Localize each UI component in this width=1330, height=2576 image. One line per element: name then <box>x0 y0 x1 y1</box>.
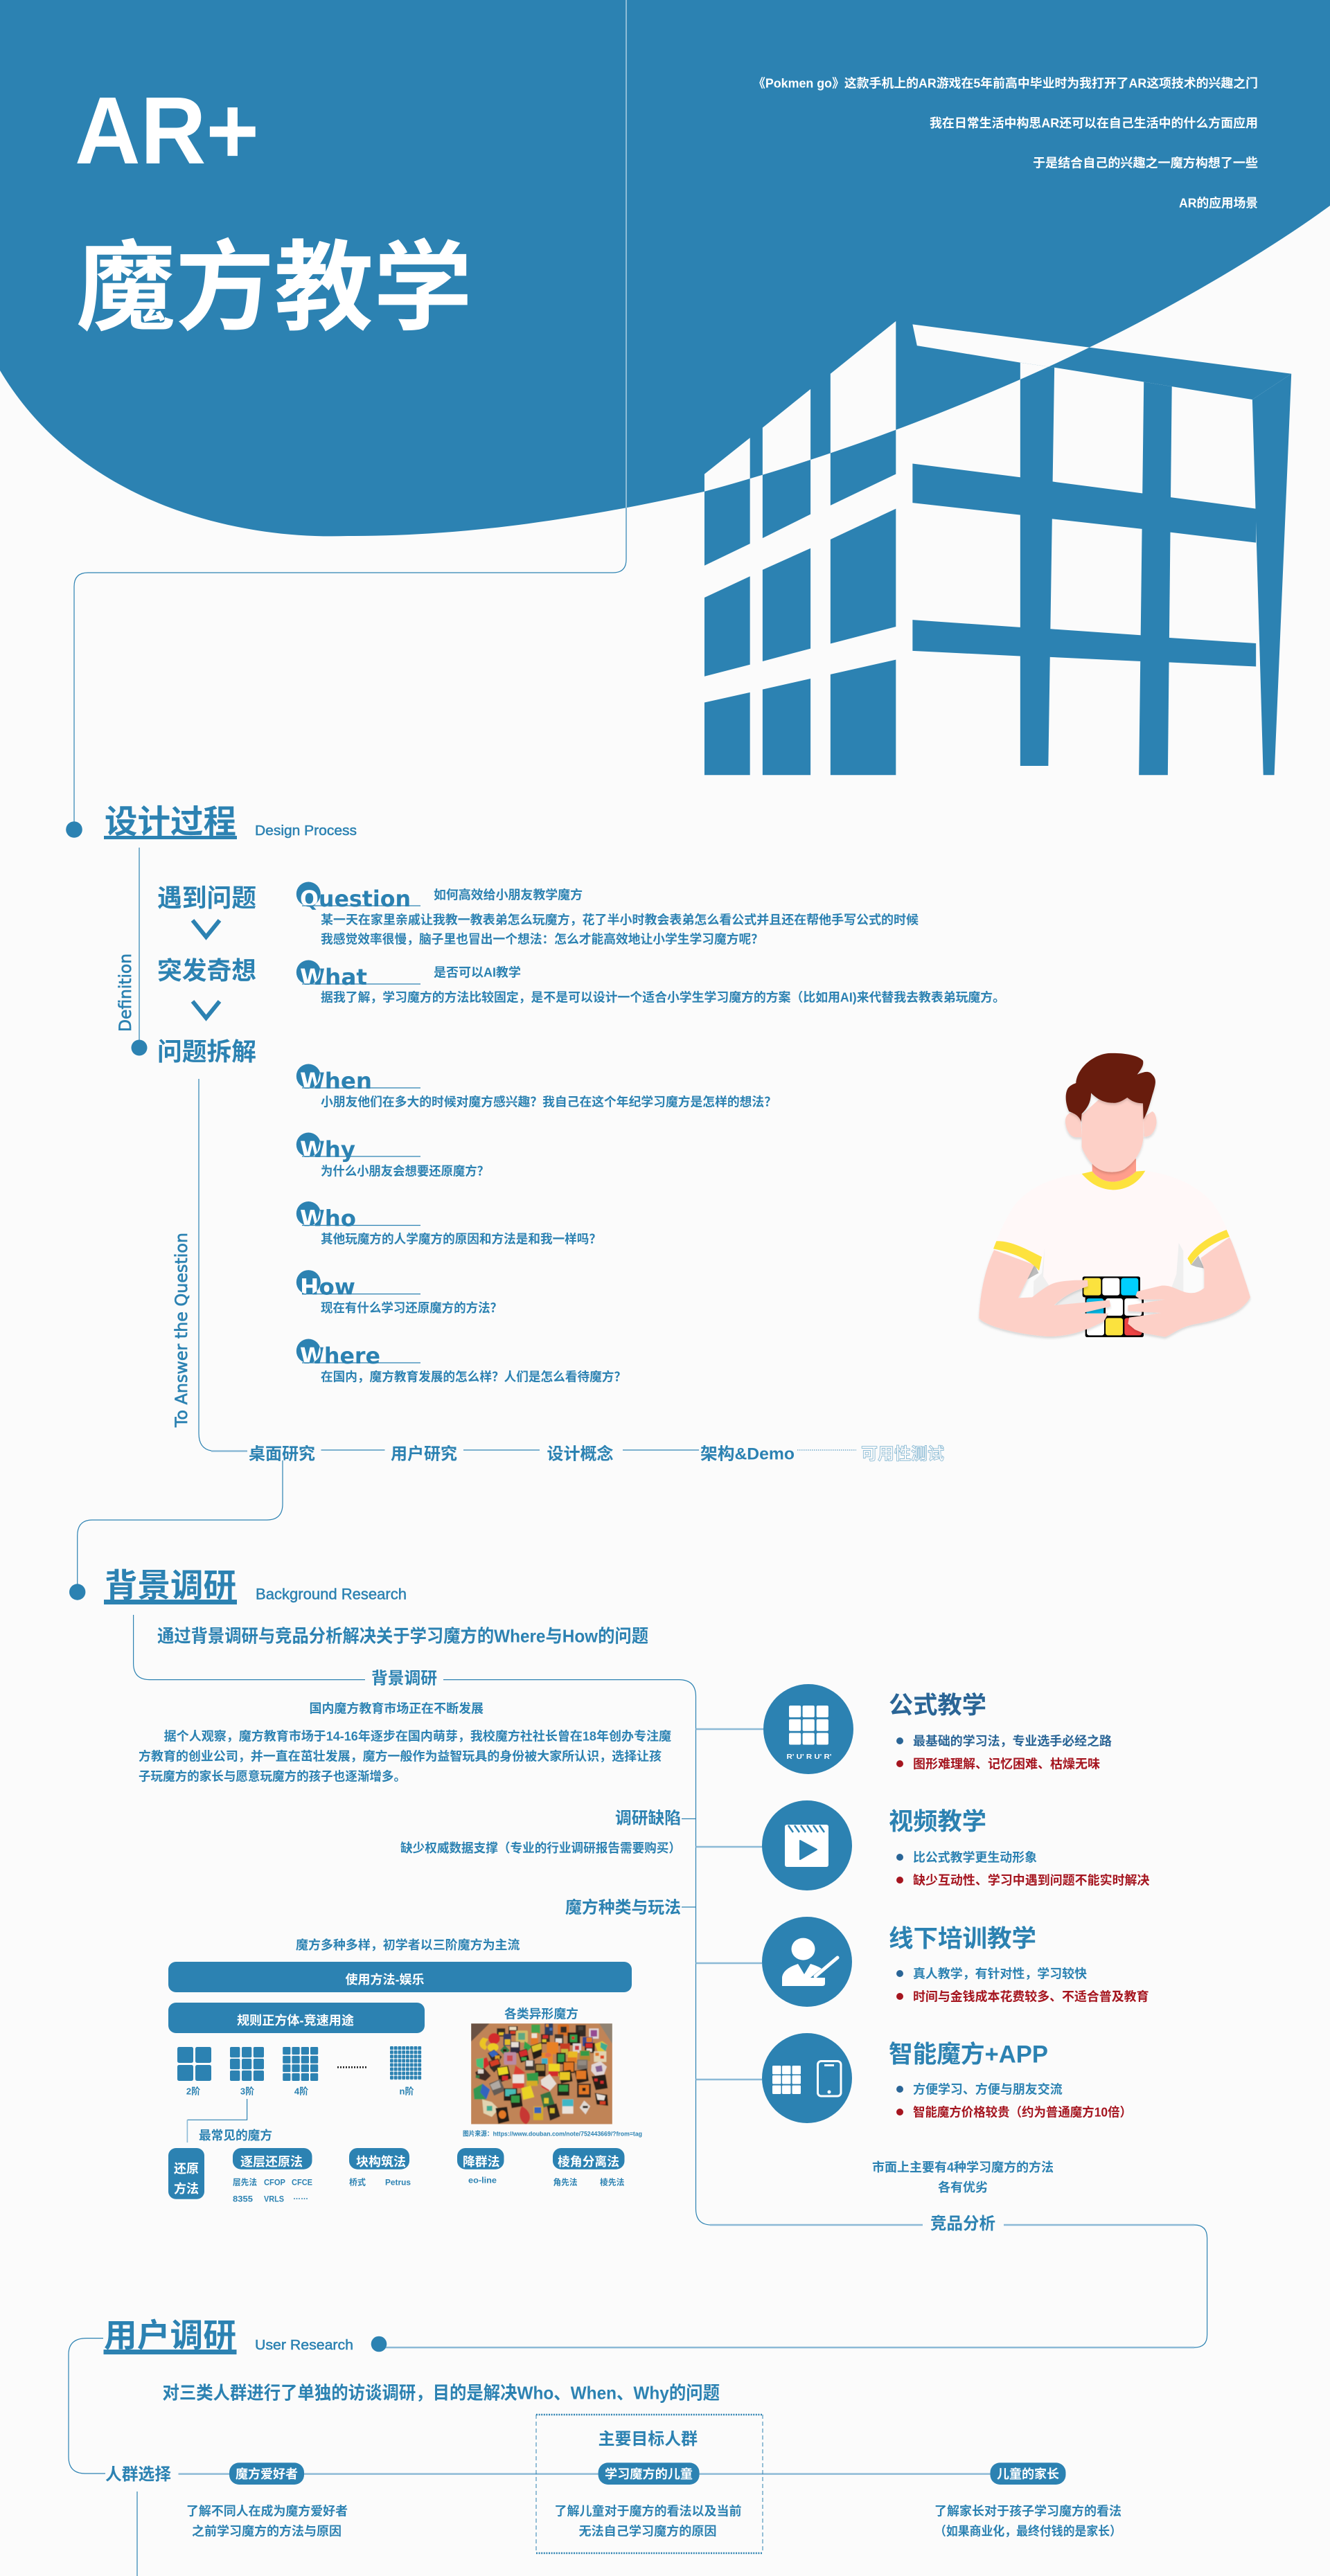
block: Where: Where <box>300 1343 380 1369</box>
persona: 儿童的家长: （如果商业化，最终付钱的是家长） <box>934 2523 1121 2539</box>
persona: 学习魔方的儿童: 无法自己学习魔方的原因 <box>579 2523 716 2539</box>
panel: 线下培训教学: 真人教学，有针对性，学习较快 <box>913 1967 1087 1980</box>
panel: 线下培训教学: 时间与金钱成本花费较多、不适合普及教育 <box>913 1989 1149 2004</box>
chart: cube orders 2, 3, 4 and n: 2阶 <box>186 2086 200 2097</box>
panel: solving methods: 块构筑法 <box>356 2154 406 2169</box>
intro paragraph: AR的应用场景 <box>1179 195 1258 211</box>
vertical label and line: To Answer the Question: To Answer the Question <box>172 1233 191 1428</box>
definition stage column: Definition <box>116 954 135 1032</box>
process timeline: 可用性测试 <box>861 1445 944 1464</box>
persona: 儿童的家长: 儿童的家长 <box>997 2467 1059 2481</box>
connector lines: user research <box>69 2338 992 2576</box>
chart: cube orders 2, 3, 4 and n <box>177 2046 422 2097</box>
icon: formula teaching circle: R' U' R U' R' <box>787 1753 831 1761</box>
process timeline: 设计概念 <box>547 1444 614 1464</box>
panel: solving methods: 降群法 <box>463 2155 499 2169</box>
persona: 魔方爱好者: 魔方爱好者 <box>236 2467 298 2481</box>
block: Why <box>296 1133 489 1179</box>
photo source caption: 图片来源：https://www.douban.com/note/752443669/?from=tag <box>463 2130 642 2138</box>
block: How: 现在有什么学习还原魔方的方法？ <box>321 1300 502 1315</box>
block: Who: Who <box>300 1205 356 1231</box>
heading: 背景调研: 背景调研 <box>105 1567 236 1604</box>
heading: 用户调研: User Research <box>255 2338 353 2353</box>
block: Question: 如何高效给小朋友教学魔方 <box>434 888 583 902</box>
heading: 设计过程: 设计过程 <box>105 803 236 840</box>
panel: 视频教学: 视频教学 <box>889 1809 986 1836</box>
callout: main target group dashed box: 主要目标人群 <box>598 2430 698 2449</box>
panel: solving methods <box>168 2148 625 2203</box>
persona: 魔方爱好者 <box>186 2462 348 2539</box>
panel: background research text: 国内魔方教育市场正在不断发展 <box>309 1701 484 1716</box>
chart: cube orders 2, 3, 4 and n: 3阶 <box>240 2086 254 2097</box>
block: What: 据我了解，学习魔方的方法比较固定，是不是可以设计一个适合小学生学习魔方的方案（比如用AI)来代替我去教表弟玩魔方。 <box>321 990 1005 1004</box>
panel: background research text: 方教育的创业公司，并一直在茁壮发展，魔方一般作为益智玩具的身份被大家所认识，选择让孩 <box>139 1749 662 1763</box>
process timeline: 桌面研究 <box>249 1445 315 1464</box>
panel: solving methods: …… <box>293 2192 308 2201</box>
summary sentence: 通过背景调研与竞品分析解决关于学习魔方的Where与How的问题 <box>157 1625 648 1646</box>
panel: 公式教学: 公式教学 <box>889 1692 986 1719</box>
heading: 各类异形魔方: 各类异形魔方 <box>504 2007 578 2021</box>
panel: solving methods: Petrus <box>385 2177 411 2187</box>
panel: solving methods: 角先法 <box>553 2177 578 2187</box>
block: When: When <box>300 1068 372 1094</box>
panel: solving methods: 逐层还原法 <box>240 2155 303 2169</box>
panel: solving methods: 方法 <box>174 2181 199 2196</box>
panel: 智能魔方+APP: 智能魔方+APP <box>889 2041 1048 2068</box>
persona: 魔方爱好者: 了解不同人在成为魔方爱好者 <box>186 2504 348 2518</box>
block: Who: 其他玩魔方的人学魔方的原因和方法是和我一样吗？ <box>321 1231 601 1246</box>
title: AR+ 魔方教学: AR+ <box>75 78 259 184</box>
persona: 学习魔方的儿童 <box>554 2462 741 2539</box>
block: What: What <box>300 964 367 990</box>
panel: solving methods: CFOP <box>264 2177 285 2187</box>
panel: solving methods: 还原 <box>174 2162 199 2176</box>
panel: 公式教学: 图形难理解、记忆困难、枯燥无味 <box>913 1757 1100 1771</box>
block: What: What <box>300 964 367 990</box>
competitor summary <box>872 2160 1054 2233</box>
block: How: How <box>300 1274 355 1300</box>
panel: 线下培训教学 <box>889 1926 1149 2004</box>
icon: video teaching circle <box>762 1800 852 1890</box>
panel: 智能魔方+APP <box>889 2041 1132 2119</box>
panel: background research text: 缺少权威数据支撑（专业的行业调研报告需要购买） <box>400 1841 681 1855</box>
panel: 视频教学: 比公式教学更生动形象 <box>913 1850 1037 1864</box>
persona: 学习魔方的儿童: 学习魔方的儿童 <box>605 2467 693 2481</box>
user research summary sentence: 对三类人群进行了单独的访谈调研，目的是解决Who、When、Why的问题 <box>162 2382 720 2403</box>
chart: cube orders 2, 3, 4 and n: 4阶 <box>294 2086 308 2097</box>
building illustration <box>704 321 1291 775</box>
panel: background research text: 魔方多种多样，初学者以三阶魔方为主流 <box>296 1938 520 1952</box>
illustration: person solving a cube <box>979 1053 1250 1337</box>
persona: 儿童的家长 <box>934 2462 1121 2539</box>
panel: background research text: 调研缺陷 <box>615 1809 681 1828</box>
panel: 线下培训教学: 线下培训教学 <box>889 1926 1036 1953</box>
connector: 3阶 to solving methods <box>187 2099 272 2143</box>
connector: 3阶 to solving methods: 最常见的魔方 <box>199 2128 272 2143</box>
definition stage column: 突发奇想 <box>157 956 256 985</box>
title: AR+ 魔方教学 <box>75 78 472 343</box>
panel: background research text: 魔方种类与玩法 <box>565 1898 681 1917</box>
block: When <box>296 1064 777 1109</box>
intro paragraph: 我在日常生活中构思AR还可以在自己生活中的什么方面应用 <box>930 116 1258 130</box>
bar: 规则正方体-竞速用途 <box>168 2003 425 2033</box>
competitor summary: 竞品分析 <box>930 2215 995 2233</box>
heading: 背景调研: Background Research <box>256 1586 407 1603</box>
competitor summary: 各有优劣 <box>938 2180 988 2194</box>
panel: solving methods: eo-line <box>468 2176 497 2185</box>
heading: 背景调研 <box>69 1567 407 1604</box>
bar: 使用方法-娱乐 <box>168 1962 632 1992</box>
rubik's cube in hand <box>1083 1276 1144 1337</box>
definition stage column <box>116 848 256 1066</box>
panel: solving methods: 层先法 <box>233 2177 257 2187</box>
block: Where: 在国内，魔方教育发展的怎么样？人们是怎么看待魔方？ <box>321 1370 626 1384</box>
icon: formula teaching circle <box>763 1684 853 1774</box>
block: What: 是否可以AI教学 <box>434 965 521 979</box>
process timeline <box>249 1444 944 1464</box>
collar <box>1082 1171 1145 1190</box>
vertical label and line: To Answer the Question <box>172 1079 247 1451</box>
panel: 智能魔方+APP: 方便学习、方便与朋友交流 <box>913 2082 1063 2097</box>
intro paragraph <box>753 76 1258 211</box>
head <box>1065 1082 1156 1172</box>
competitor summary: 市面上主要有4种学习魔方的方法 <box>872 2160 1054 2174</box>
neck <box>1092 1159 1136 1182</box>
block: When: 小朋友他们在多大的时候对魔方感兴趣？我自己在这个年纪学习魔方是怎样的想法？ <box>321 1094 777 1109</box>
icon: offline training circle <box>762 1917 852 2007</box>
block: Question <box>296 882 919 946</box>
panel: 智能魔方+APP: 智能魔方价格较贵（约为普通魔方10倍） <box>913 2105 1132 2119</box>
icon: smart cube and app circle <box>762 2033 852 2123</box>
intro paragraph: 《Pokmen go》这款手机上的AR游戏在5年前高中毕业时为我打开了AR这项技术的兴趣之门 <box>753 76 1258 90</box>
block: Why: Why <box>300 1136 355 1163</box>
panel: background research text <box>139 1670 681 1952</box>
block: When: When <box>300 1068 372 1094</box>
persona: 儿童的家长: 了解家长对于孩子学习魔方的看法 <box>934 2504 1121 2518</box>
panel: solving methods: VRLS <box>264 2194 284 2203</box>
panel: 视频教学: 缺少互动性、学习中遇到问题不能实时解决 <box>913 1872 1150 1888</box>
heading: 设计过程: Design Process <box>255 823 357 839</box>
block: How <box>296 1270 502 1315</box>
panel: background research text: 背景调研 <box>371 1670 437 1688</box>
block: Who <box>296 1201 601 1246</box>
heading: 用户调研: 用户调研 <box>104 2317 236 2354</box>
definition stage column: 遇到问题 <box>157 884 256 912</box>
label: 人群选择: 人群选择 <box>105 2465 171 2484</box>
block: Who: Who <box>300 1205 356 1231</box>
heading: 用户调研 <box>104 2317 387 2354</box>
title: AR+ 魔方教学: 魔方教学 <box>76 233 472 343</box>
panel: 公式教学: 最基础的学习法，专业选手必经之路 <box>913 1734 1112 1748</box>
block: Why: Why <box>300 1136 355 1163</box>
icon: shirt <box>994 1171 1230 1302</box>
callout: main target group dashed box <box>536 2415 763 2553</box>
bar: 规则正方体-竞速用途: 规则正方体-竞速用途 <box>237 2013 354 2028</box>
block: Where <box>296 1339 626 1384</box>
panel: 视频教学 <box>889 1809 1150 1888</box>
photo: assorted twisty puzzles on a table <box>471 2023 612 2125</box>
block: Where: Where <box>300 1343 380 1369</box>
block: Question: 某一天在家里亲戚让我教一教表弟怎么玩魔方，花了半小时教会表弟怎么看公式并且还在帮他手写公式的时候 <box>321 913 919 927</box>
fold shading <box>1027 1243 1204 1305</box>
connector: desktop research to background research <box>78 1460 283 1586</box>
panel: solving methods: 棱先法 <box>600 2177 625 2187</box>
block: How: How <box>300 1274 355 1300</box>
persona: 学习魔方的儿童: 了解儿童对于魔方的看法以及当前 <box>554 2504 741 2518</box>
arms and hands <box>979 1237 1250 1337</box>
bar: 使用方法-娱乐: 使用方法-娱乐 <box>345 1972 424 1987</box>
panel: solving methods: 桥式 <box>349 2177 366 2187</box>
panel: solving methods: 棱角分离法 <box>558 2154 619 2169</box>
block: What <box>296 960 1005 1004</box>
panel: background research text: 子玩魔方的家长与愿意玩魔方的孩子也逐渐增多。 <box>139 1769 406 1784</box>
block: Question: 我感觉效率很慢，脑子里也冒出一个想法：怎么才能高效地让小学生学习魔方呢？ <box>321 932 763 946</box>
block: Why: 为什么小朋友会想要还原魔方？ <box>321 1163 489 1179</box>
connector lines: background research tree <box>134 1615 1207 2347</box>
sleeve cuffs <box>993 1230 1230 1271</box>
process timeline: 用户研究 <box>391 1445 457 1464</box>
chart: cube orders 2, 3, 4 and n: n阶 <box>400 2086 414 2097</box>
persona: 魔方爱好者: 之前学习魔方的方法与原因 <box>192 2523 342 2539</box>
block: Question: Question <box>300 886 411 912</box>
panel: background research text: 据个人观察，魔方教育市场于14-16年逐步在国内萌芽，我校魔方社社长曾在18年创办专注魔 <box>164 1728 671 1744</box>
panel: solving methods: 8355 <box>233 2194 253 2203</box>
intro paragraph: 于是结合自己的兴趣之一魔方构想了一些 <box>1033 155 1258 170</box>
block: Question: Question <box>300 886 411 912</box>
panel: solving methods: CFCE <box>292 2177 312 2187</box>
panel: 公式教学 <box>889 1692 1112 1771</box>
definition stage column: 问题拆解 <box>157 1037 256 1066</box>
hair <box>1066 1053 1155 1122</box>
connector: hero to design process <box>74 0 626 822</box>
process timeline: 架构&Demo <box>700 1445 795 1464</box>
heading: 设计过程 <box>66 803 357 840</box>
